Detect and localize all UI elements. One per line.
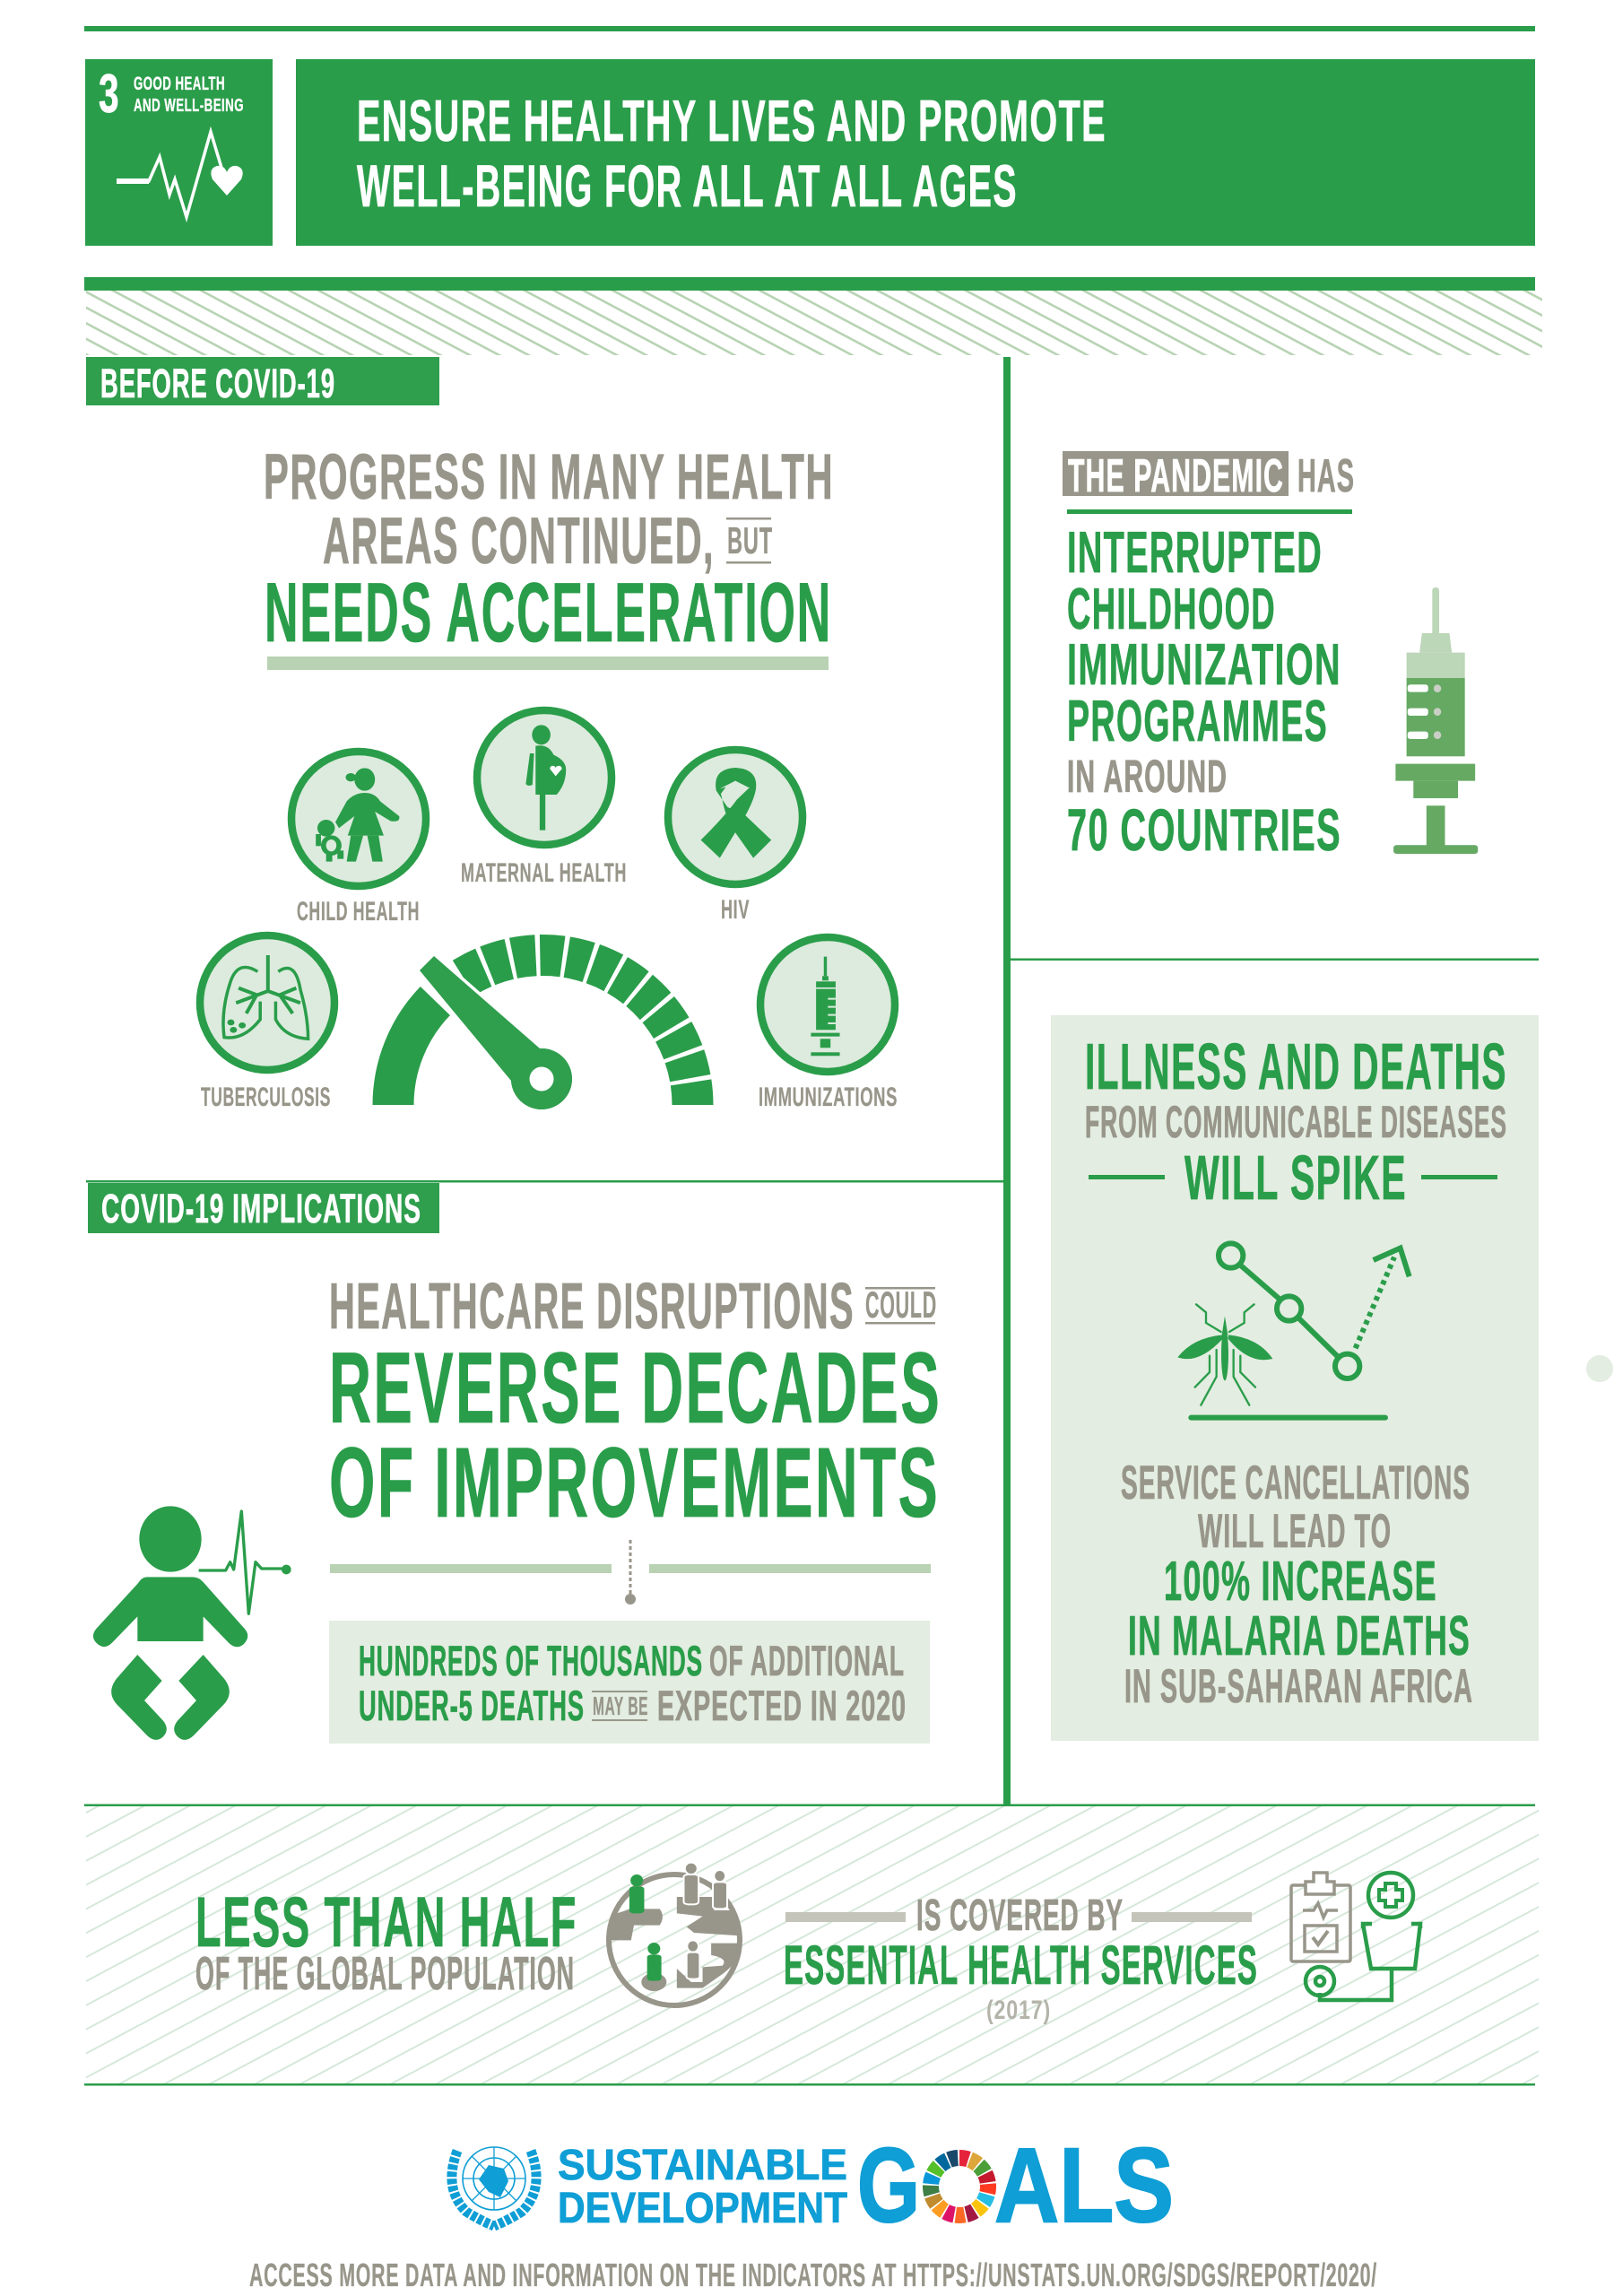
text: is covered by essential health services: IS COVERED BY — [916, 1892, 1124, 1940]
icon: clipboard — [1291, 1873, 1350, 1961]
goal number: 3 — [99, 64, 120, 124]
icon: child health — [291, 752, 426, 886]
text: interrupted programmes: CHILDHOOD — [1067, 576, 1276, 641]
footer logo: sustainable development goals: DEVELOPMENT — [558, 2185, 847, 2232]
text: interrupted programmes: IN AROUND — [1067, 751, 1228, 802]
heading: progress needs acceleration: PROGRESS IN MANY HEALTH — [264, 442, 834, 513]
title banner: ENSURE HEALTHY LIVES AND PROMOTE — [357, 88, 1106, 153]
section label: before covid-19: BEFORE COVID-19 — [100, 361, 335, 406]
gauge needle — [420, 956, 572, 1109]
goal name: AND WELL-BEING — [134, 96, 244, 116]
dot — [1586, 1355, 1613, 1382]
goal name: GOOD HEALTH — [134, 74, 225, 94]
panel: illness and deaths: WILL SPIKE — [1184, 1143, 1407, 1213]
callout: the pandemic has: HAS — [1297, 450, 1355, 502]
icon: mosquito and rising chart — [1177, 1243, 1410, 1418]
title banner — [296, 59, 1535, 246]
icon: heartbeat and heart — [117, 132, 243, 217]
label: maternal health: MATERNAL HEALTH — [461, 858, 627, 888]
callout: under-5 deaths: MAY BE — [593, 1692, 648, 1721]
text: interrupted programmes: PROGRAMMES — [1067, 688, 1328, 753]
text: is covered by essential health services — [784, 1892, 1258, 2025]
text: less than half — [195, 1882, 577, 2000]
icon: hiv ribbon — [668, 750, 803, 884]
section label: covid-19 implications: COVID-19 IMPLICATIONS — [101, 1186, 421, 1231]
heading: reverse decades of improvements — [329, 1271, 941, 1605]
heading: progress needs acceleration: NEEDS ACCELERATION — [265, 565, 832, 659]
text: less than half: LESS THAN HALF — [195, 1882, 577, 1961]
callout: under-5 deaths — [329, 1621, 930, 1744]
gauge — [393, 955, 692, 1109]
footer logo: sustainable development goals: ALS — [994, 2126, 1174, 2245]
text: interrupted programmes: INTERRUPTED — [1067, 519, 1323, 585]
callout: under-5 deaths: OF ADDITIONAL — [709, 1637, 905, 1684]
heading: progress needs acceleration — [264, 442, 834, 670]
heading: reverse decades of improvements: REVERSE DECADES — [329, 1332, 941, 1444]
callout: under-5 deaths: UNDER-5 DEATHS — [359, 1682, 585, 1729]
label: tuberculosis: TUBERCULOSIS — [201, 1083, 331, 1112]
text: interrupted programmes: IMMUNIZATION — [1067, 631, 1341, 697]
icon: baby with pulse — [93, 1506, 291, 1740]
icon: stethoscope — [1306, 1873, 1420, 2000]
callout: under-5 deaths: HUNDREDS OF THOUSANDS — [359, 1637, 703, 1684]
text: service cancellations — [1121, 1457, 1473, 1713]
callout: the pandemic has: THE PANDEMIC — [1068, 450, 1284, 502]
icon: maternal health — [477, 710, 612, 845]
text: less than half: OF THE GLOBAL POPULATION — [195, 1948, 575, 2000]
text: is covered by essential health services: (2017) — [986, 1996, 1051, 2025]
title banner: WELL-BEING FOR ALL AT ALL AGES — [357, 152, 1018, 219]
heading: progress needs acceleration: BUT — [727, 519, 773, 561]
section label: covid-19 implications — [88, 1183, 439, 1233]
icon: tuberculosis lungs — [200, 935, 334, 1070]
goal 3 badge — [85, 59, 273, 246]
text: interrupted programmes: 70 COUNTRIES — [1067, 796, 1341, 863]
label: hiv: HIV — [721, 895, 750, 925]
icon: large syringe — [1393, 587, 1478, 854]
heading: reverse decades of improvements: HEALTHCARE DISRUPTIONS — [329, 1271, 855, 1343]
callout: the pandemic has — [1063, 450, 1355, 863]
label: child health: CHILD HEALTH — [297, 897, 420, 926]
icon: immunization syringe — [760, 937, 895, 1072]
heading: reverse decades of improvements: COULD — [865, 1283, 937, 1326]
icon: people on puzzle globe — [608, 1863, 741, 2005]
footer logo: sustainable development goals: SUSTAINABLE — [558, 2142, 847, 2189]
label: immunizations: IMMUNIZATIONS — [759, 1083, 898, 1112]
text: service cancellations: WILL LEAD TO — [1198, 1505, 1392, 1558]
footer logo: sustainable development goals: G — [857, 2126, 920, 2245]
panel: illness and deaths — [1051, 1015, 1539, 1741]
heading: reverse decades of improvements: OF IMPROVEMENTS — [329, 1428, 940, 1538]
sdg colour wheel — [919, 2146, 1000, 2227]
footer logo: sustainable development goals — [452, 2126, 1174, 2245]
un emblem — [452, 2147, 536, 2226]
goal name — [134, 74, 244, 116]
heading: progress needs acceleration: AREAS CONTINUED, — [323, 505, 715, 578]
text: interrupted programmes — [1067, 519, 1341, 863]
callout: under-5 deaths: EXPECTED IN 2020 — [657, 1682, 907, 1729]
